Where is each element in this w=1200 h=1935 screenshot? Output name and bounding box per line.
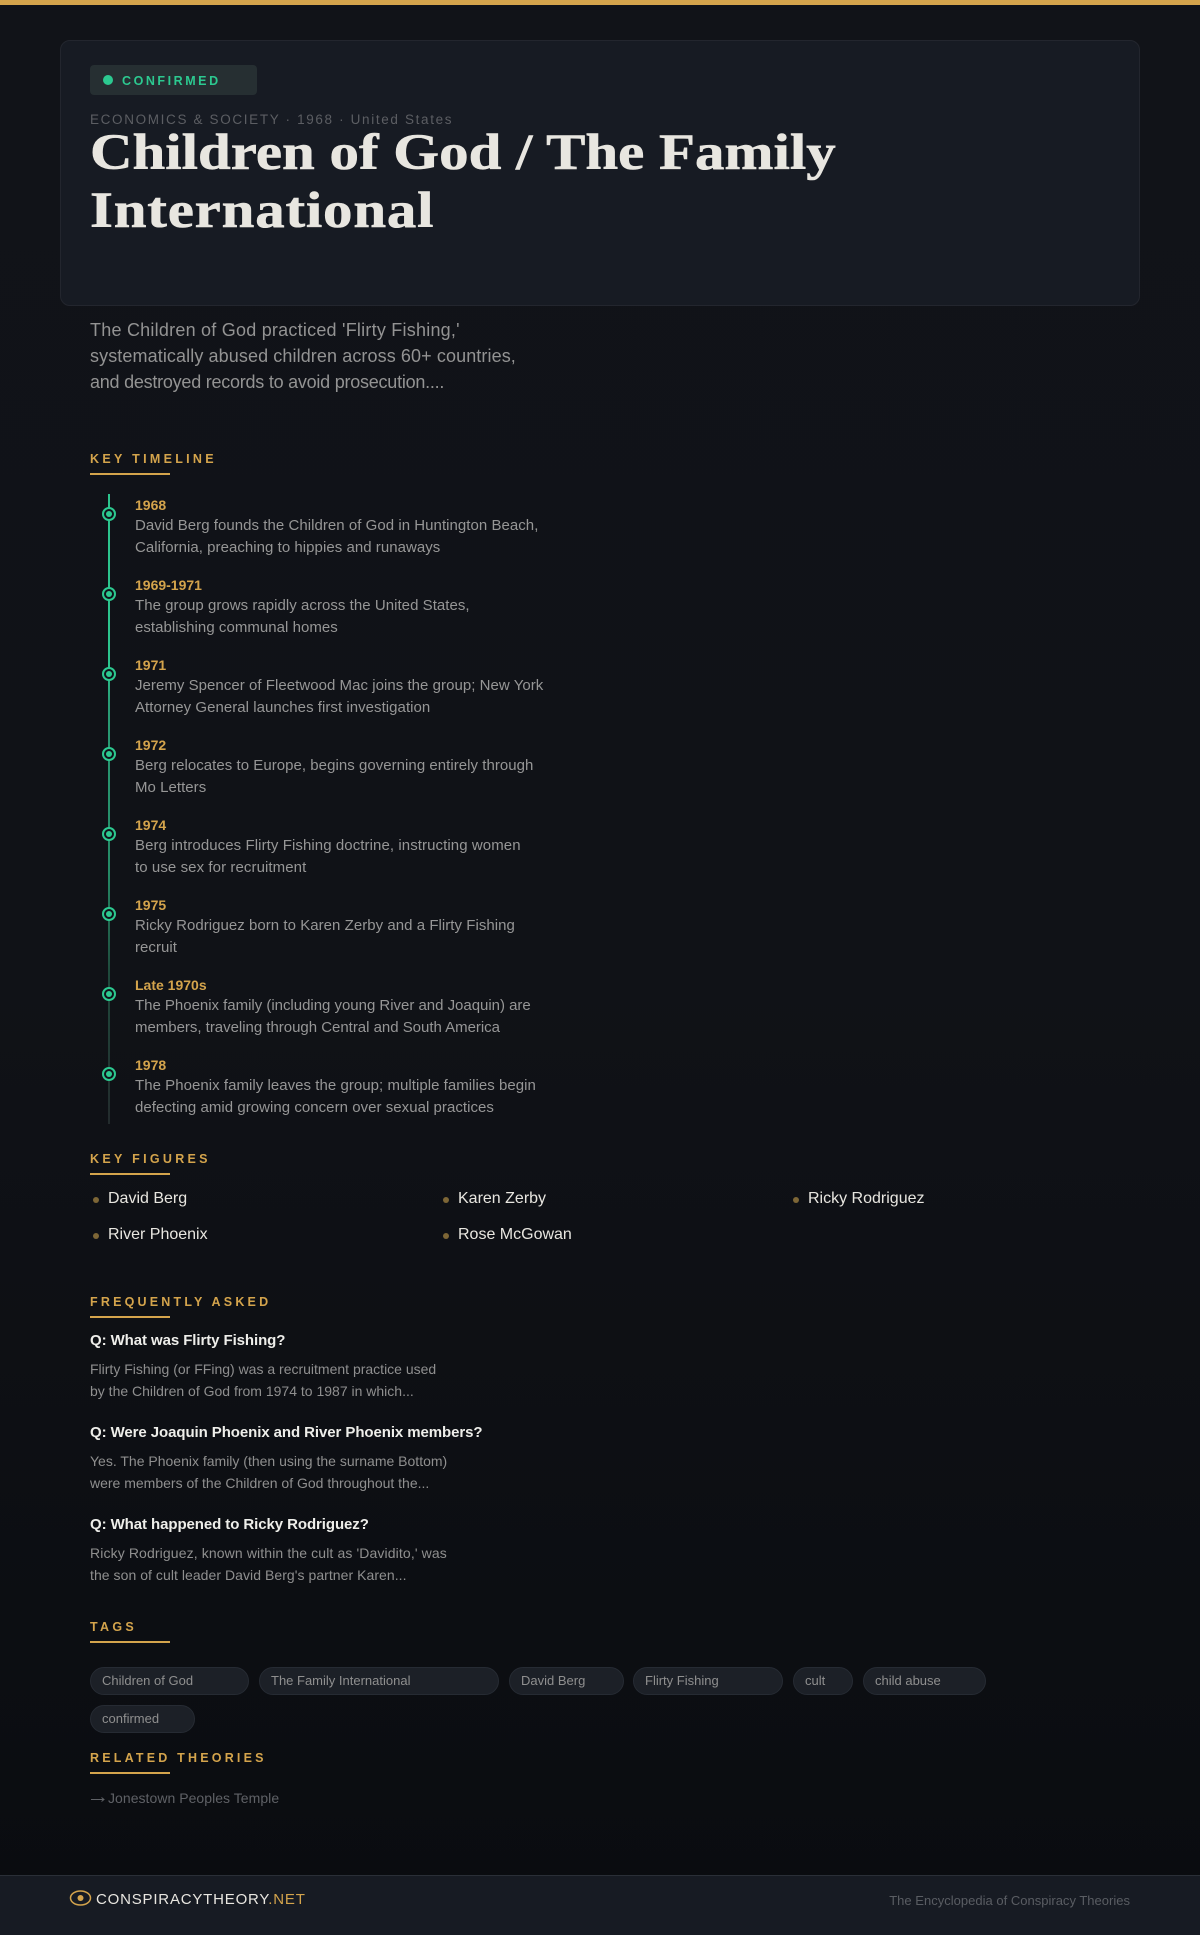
intro summary: and destroyed records to avoid prosecution.... bbox=[90, 372, 444, 392]
title: Children of God / The Family bbox=[90, 125, 836, 181]
key figures list bbox=[93, 1190, 924, 1243]
status badge: confirmed: CONFIRMED bbox=[122, 74, 221, 88]
timeline entry 1969-1971: establishing communal homes bbox=[135, 619, 338, 636]
heading: related theories: RELATED THEORIES bbox=[90, 1751, 267, 1765]
faq 2 bbox=[90, 1424, 482, 1491]
faq 3: Ricky Rodriguez, known within the cult as 'Davidito,' was bbox=[90, 1545, 447, 1561]
faq 3: Q: What happened to Ricky Rodriguez? bbox=[90, 1516, 369, 1533]
timeline entry 1975: Ricky Rodriguez born to Karen Zerby and a Flirty Fishing bbox=[135, 917, 515, 934]
timeline entry 1971: Attorney General launches first investigation bbox=[135, 699, 430, 716]
faq 3 bbox=[90, 1516, 447, 1583]
timeline entry 1969-1971: 1969-1971 bbox=[135, 577, 202, 593]
timeline entry late 1970s: The Phoenix family (including young River and Joaquin) are bbox=[135, 997, 531, 1014]
intro summary: systematically abused children across 60+ countries, bbox=[90, 346, 516, 366]
timeline entry 1972: 1972 bbox=[135, 737, 166, 753]
timeline entry 1974 bbox=[102, 817, 521, 876]
timeline entry 1978: defecting amid growing concern over sexual practices bbox=[135, 1099, 494, 1116]
category and date line: ECONOMICS & SOCIETY · 1968 · United States bbox=[90, 112, 453, 127]
panel: header card bbox=[60, 40, 1140, 306]
related theory link: Jonestown Peoples Temple bbox=[108, 1790, 279, 1806]
intro summary: The Children of God practiced 'Flirty Fishing,' bbox=[90, 320, 460, 340]
key figures list: Rose McGowan bbox=[458, 1226, 572, 1243]
faq 2: Yes. The Phoenix family (then using the surname Bottom) bbox=[90, 1453, 447, 1469]
title: International bbox=[90, 183, 434, 239]
timeline entry 1971: 1971 bbox=[135, 657, 166, 673]
tags: David Berg bbox=[521, 1673, 585, 1688]
timeline entry 1972 bbox=[102, 737, 533, 796]
timeline entry 1968 bbox=[102, 497, 538, 556]
timeline entry 1978 bbox=[102, 1057, 536, 1116]
tags: Flirty Fishing bbox=[645, 1673, 719, 1688]
faq 3: the son of cult leader David Berg's partner Karen... bbox=[90, 1567, 407, 1583]
timeline entry 1969-1971 bbox=[102, 577, 470, 636]
timeline entry late 1970s: members, traveling through Central and South America bbox=[135, 1019, 500, 1036]
brand name: CONSPIRACYTHEORY.NET bbox=[96, 1891, 306, 1908]
title bbox=[90, 125, 836, 239]
heading: key timeline: KEY TIMELINE bbox=[90, 452, 217, 466]
top accent bar bbox=[0, 0, 1200, 5]
tags: cult bbox=[805, 1673, 825, 1688]
timeline entry 1968: 1968 bbox=[135, 497, 166, 513]
timeline entry 1974: 1974 bbox=[135, 817, 166, 833]
timeline entry 1971 bbox=[102, 657, 544, 716]
tags: The Family International bbox=[271, 1673, 410, 1688]
faq 1 bbox=[90, 1332, 436, 1399]
faq 1: Q: What was Flirty Fishing? bbox=[90, 1332, 285, 1349]
intro summary bbox=[90, 320, 516, 392]
faq 2: Q: Were Joaquin Phoenix and River Phoenix members? bbox=[90, 1424, 482, 1441]
status badge: confirmed bbox=[90, 65, 257, 95]
key figures list: Karen Zerby bbox=[458, 1190, 546, 1207]
faq 1: by the Children of God from 1974 to 1987 in which... bbox=[90, 1383, 414, 1399]
key figures list: David Berg bbox=[108, 1190, 187, 1207]
tags: child abuse bbox=[875, 1673, 941, 1688]
heading: key figures: KEY FIGURES bbox=[90, 1152, 211, 1166]
timeline entry late 1970s bbox=[102, 977, 531, 1036]
timeline entry 1968: California, preaching to hippies and runaways bbox=[135, 539, 440, 556]
timeline entry 1971: Jeremy Spencer of Fleetwood Mac joins the group; New York bbox=[135, 677, 543, 694]
footer bbox=[0, 1875, 1200, 1935]
timeline entry 1972: Berg relocates to Europe, begins governing entirely through bbox=[135, 757, 533, 774]
faq 2: were members of the Children of God throughout the... bbox=[90, 1475, 429, 1491]
timeline bbox=[108, 494, 110, 1124]
timeline entry 1968: David Berg founds the Children of God in Huntington Beach, bbox=[135, 517, 538, 534]
heading: tags: TAGS bbox=[90, 1620, 137, 1634]
timeline entry 1978: The Phoenix family leaves the group; multiple families begin bbox=[135, 1077, 536, 1094]
timeline entry 1975: recruit bbox=[135, 939, 177, 956]
heading: frequently asked: FREQUENTLY ASKED bbox=[90, 1295, 271, 1309]
timeline entry 1974: to use sex for recruitment bbox=[135, 859, 306, 876]
tags: confirmed bbox=[102, 1711, 159, 1726]
key figures list: River Phoenix bbox=[108, 1226, 208, 1243]
faq 1: Flirty Fishing (or FFing) was a recruitment practice used bbox=[90, 1361, 436, 1377]
timeline entry 1972: Mo Letters bbox=[135, 779, 206, 796]
timeline entry late 1970s: Late 1970s bbox=[135, 977, 207, 993]
timeline entry 1974: Berg introduces Flirty Fishing doctrine, instructing women bbox=[135, 837, 521, 854]
tags: Children of God bbox=[102, 1673, 193, 1688]
timeline entry 1975: 1975 bbox=[135, 897, 166, 913]
timeline entry 1978: 1978 bbox=[135, 1057, 166, 1073]
key figures list: Ricky Rodriguez bbox=[808, 1190, 924, 1207]
icon: eye logo bbox=[70, 1890, 92, 1906]
timeline entry 1969-1971: The group grows rapidly across the United States, bbox=[135, 597, 470, 614]
tags bbox=[90, 1667, 986, 1733]
timeline entry 1975 bbox=[102, 897, 515, 956]
footer tagline: The Encyclopedia of Conspiracy Theories bbox=[889, 1893, 1130, 1908]
